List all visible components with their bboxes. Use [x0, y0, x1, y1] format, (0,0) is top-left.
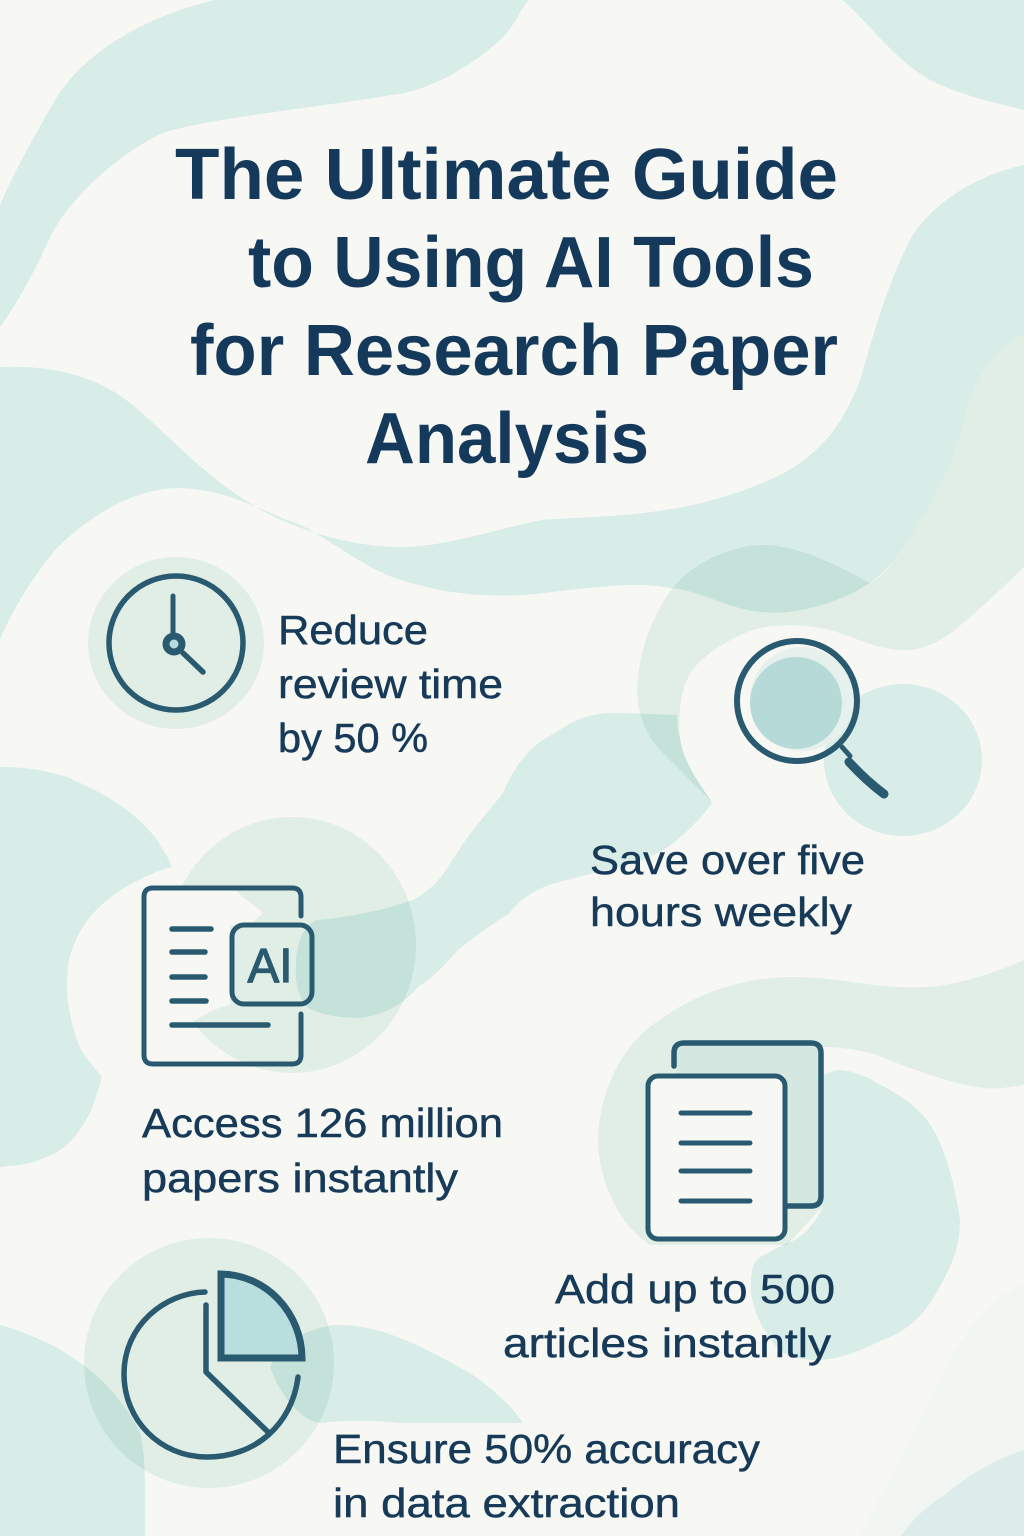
stat: add articles: articles instantly	[503, 1320, 832, 1366]
stat: ensure accuracy: in data extraction	[333, 1480, 680, 1526]
stat: ensure accuracy: Ensure 50% accuracy	[333, 1426, 761, 1472]
stat: save hours	[590, 837, 865, 935]
stat: reduce review time	[278, 607, 503, 761]
title: to Using AI Tools	[248, 223, 814, 303]
icon: pie chart	[124, 1274, 302, 1457]
title: Analysis	[365, 399, 649, 479]
stat: save hours: hours weekly	[590, 889, 853, 935]
stat: access papers: Access 126 million	[142, 1100, 503, 1146]
title: The Ultimate Guide	[175, 135, 838, 215]
stat: access papers	[142, 1100, 503, 1201]
icon: AI document: AI	[248, 940, 292, 993]
stat: save hours: Save over five	[590, 837, 865, 883]
icon: AI document	[144, 888, 312, 1064]
stat: access papers: papers instantly	[142, 1155, 459, 1201]
stat: reduce review time: Reduce	[278, 607, 428, 653]
stat: reduce review time: review time	[278, 661, 503, 707]
stat: add articles	[503, 1266, 835, 1366]
stat: add articles: Add up to 500	[555, 1266, 835, 1312]
icon: stacked documents	[648, 1043, 821, 1239]
title: for Research Paper	[190, 311, 838, 391]
title	[175, 135, 838, 479]
stat: ensure accuracy	[333, 1426, 761, 1526]
icon: clock	[109, 576, 243, 710]
icon: magnifying glass	[737, 641, 884, 794]
stat: reduce review time: by 50 %	[278, 715, 428, 761]
